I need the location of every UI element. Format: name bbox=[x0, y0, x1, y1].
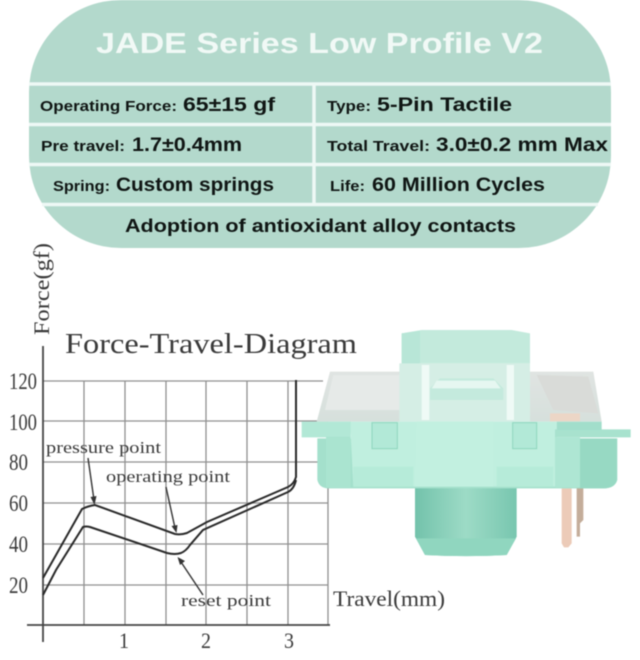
x axis title: Travel(mm) bbox=[333, 586, 445, 611]
switch stem bottom bbox=[415, 487, 517, 556]
x axis labels bbox=[119, 628, 294, 653]
y axis labels: 100 bbox=[9, 410, 37, 435]
spec: life: Life: bbox=[330, 178, 365, 195]
clear top housing bbox=[317, 372, 602, 422]
force curve: press bbox=[43, 380, 296, 578]
label: reset point: reset point bbox=[181, 591, 271, 610]
spec: operating force: 65±15 gf bbox=[183, 95, 276, 116]
left flange bbox=[302, 422, 351, 437]
spec: type: 5-Pin Tactile bbox=[377, 95, 512, 116]
x axis labels: 3 bbox=[284, 628, 294, 653]
clear housing centre bbox=[399, 363, 530, 422]
y axis labels: 120 bbox=[9, 369, 37, 394]
chart title: Force-Travel-Diagram bbox=[65, 328, 357, 360]
icon: low profile switch bbox=[302, 330, 631, 556]
pin top reflection bbox=[550, 413, 580, 421]
lower housing bbox=[317, 438, 617, 488]
arrow: reset point bbox=[178, 557, 203, 595]
x axis labels: 2 bbox=[201, 628, 211, 653]
y axis labels bbox=[9, 369, 37, 598]
y axis labels: 20 bbox=[9, 573, 28, 598]
spec: type: Type: bbox=[327, 98, 371, 115]
spec: total travel: Total Travel: bbox=[327, 138, 430, 155]
spec: total travel: 3.0±0.2 mm Max bbox=[436, 135, 609, 156]
panel background pill bbox=[29, 0, 611, 248]
spec: spring: Spring: bbox=[53, 178, 110, 195]
stem top bbox=[402, 330, 530, 363]
y axis labels: 40 bbox=[9, 532, 28, 557]
spec: operating force: Operating Force: bbox=[40, 98, 177, 115]
spec: life: 60 Million Cycles bbox=[372, 175, 545, 196]
x axis labels: 1 bbox=[119, 628, 129, 653]
panel: specifications bbox=[29, 0, 611, 248]
arrow: pressure point bbox=[88, 458, 96, 505]
chart: force-travel diagram bbox=[9, 243, 445, 653]
arrow: operating point bbox=[166, 487, 178, 533]
y axis title: Force(gf) bbox=[29, 243, 54, 335]
spec: pre travel: 1.7±0.4mm bbox=[132, 135, 242, 156]
spec: spring: Custom springs bbox=[116, 175, 274, 196]
title: JADE Series Low Profile V2 bbox=[96, 28, 543, 60]
inner arch bbox=[430, 378, 503, 400]
y axis labels: 80 bbox=[9, 450, 28, 475]
housing clips bbox=[372, 423, 537, 449]
switch pins bbox=[562, 487, 583, 547]
label: operating point: operating point bbox=[106, 467, 230, 486]
right flange bbox=[555, 429, 631, 437]
spec: contacts: Adoption of antioxidant alloy contacts bbox=[125, 216, 516, 236]
centre front plate bbox=[415, 422, 493, 487]
axes bbox=[27, 346, 330, 642]
spec: pre travel: Pre travel: bbox=[41, 138, 125, 155]
label: pressure point: pressure point bbox=[46, 438, 161, 457]
force curve: release bbox=[43, 480, 296, 595]
y axis labels: 60 bbox=[9, 491, 28, 516]
